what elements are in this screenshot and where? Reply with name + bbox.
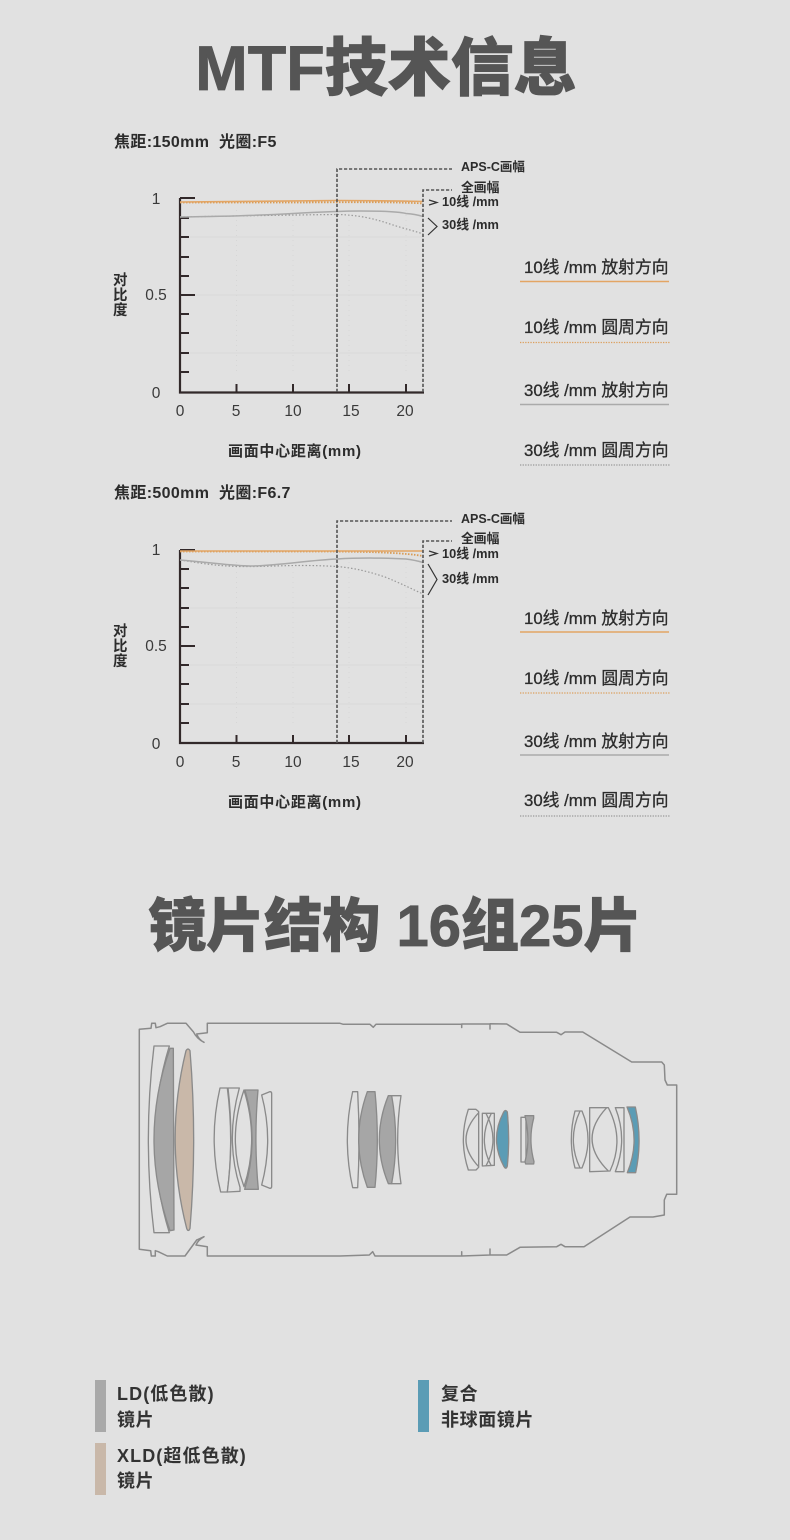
- label: 30 lines per mm: 30线 /mm: [442, 217, 499, 232]
- chart: MTF at 500mm F6.7: [113, 511, 525, 811]
- dashed frame: APS-C: [337, 521, 452, 743]
- legend: chart 2 line styles: [520, 609, 670, 816]
- y axis values: 0: [152, 385, 161, 402]
- x axis values: 20: [396, 754, 414, 771]
- label: APS-C frame: APS-C画幅: [461, 511, 525, 526]
- curve: 30 lines tangential dotted: [180, 214, 423, 234]
- legend item: 30 lines radial: 30线 /mm 放射方向: [524, 381, 669, 400]
- y axis ticks and x axis: [180, 550, 424, 743]
- heading: lens structure: 镜片结构 16组25片: [148, 894, 642, 959]
- y axis title: [113, 622, 128, 670]
- fifth group: [521, 1116, 534, 1164]
- legend item: 30 lines tangential: 30线 /mm 圆周方向: [524, 791, 669, 810]
- x axis values: [176, 403, 414, 420]
- x axis values: 5: [232, 403, 240, 420]
- fourth group: [463, 1109, 494, 1170]
- x axis values: 5: [232, 754, 240, 771]
- y axis values: 1: [152, 191, 160, 208]
- lens barrel outline: [139, 1023, 677, 1256]
- y axis values: 1: [152, 542, 160, 559]
- curve: 30 lines radial solid: [180, 558, 423, 566]
- y axis title: 度: [113, 652, 128, 670]
- x axis values: 15: [342, 754, 360, 771]
- x axis values: 0: [176, 754, 185, 771]
- aspherical element: [496, 1110, 509, 1168]
- label: composite: 复合: [441, 1383, 478, 1404]
- label: 10 lines per mm: 10线 /mm: [442, 546, 499, 561]
- y axis ticks and x axis: [180, 198, 424, 392]
- label: lens: 镜片: [117, 1470, 154, 1491]
- front element: [148, 1046, 169, 1233]
- legend item: 30 lines radial: 30线 /mm 放射方向: [524, 732, 669, 751]
- y axis values: 0.5: [145, 638, 167, 655]
- curve: 10 lines radial solid: [180, 550, 423, 552]
- left lens groups: [148, 1046, 401, 1233]
- legend: LD lens: [95, 1380, 215, 1432]
- y axis title: 对: [113, 622, 128, 640]
- second group: [214, 1088, 272, 1192]
- curve: 30 lines tangential dotted: [180, 560, 423, 594]
- label: 30 lines per mm: [428, 217, 499, 235]
- legend: chart 1 line styles: [520, 258, 670, 465]
- curve: 30 lines radial solid: [180, 211, 423, 217]
- curve: 10 lines tangential dotted: [180, 552, 423, 556]
- sixth group: [571, 1108, 624, 1172]
- y axis title: [113, 271, 128, 319]
- third group: [347, 1092, 401, 1188]
- aspherical rear element: [627, 1107, 639, 1173]
- y axis title: 度: [113, 301, 128, 319]
- y axis title: 比: [113, 638, 128, 655]
- legend item: 10 lines radial: 10线 /mm 放射方向: [524, 258, 669, 277]
- curve: 10 lines tangential dotted: [180, 202, 423, 204]
- legend item: 10 lines tangential: 10线 /mm 圆周方向: [524, 669, 669, 688]
- label: 30 lines per mm: [428, 564, 499, 595]
- heading: chart 2 focal length and aperture: 焦距:500mm: [114, 485, 209, 502]
- dashed frame: full frame: [423, 541, 452, 743]
- label: lens: 镜片: [117, 1409, 154, 1430]
- heading: chart 1 focal length and aperture: 焦距:150mm: [114, 134, 209, 151]
- x axis title: 画面中心距离(mm): [228, 442, 361, 460]
- x axis values: [176, 754, 414, 771]
- y axis title: 比: [113, 287, 128, 304]
- y axis values: 0.5: [145, 287, 167, 304]
- dashed frame: APS-C: [337, 169, 452, 392]
- legend: XLD lens: [95, 1443, 247, 1495]
- swatch: XLD tan: [95, 1443, 106, 1495]
- y axis values: 0: [152, 736, 161, 753]
- heading: chart 1 focal length and aperture: 光圈:F5: [219, 133, 277, 151]
- label: full frame: 全画幅: [461, 180, 500, 195]
- x axis values: 10: [284, 403, 302, 420]
- x axis values: 20: [396, 403, 414, 420]
- legend item: 30 lines tangential: 30线 /mm 圆周方向: [524, 441, 669, 460]
- legend: aspherical lens: [418, 1380, 534, 1432]
- chart: MTF at 150mm F5: [113, 159, 525, 460]
- right lens groups: [463, 1107, 639, 1173]
- swatch: aspherical teal: [418, 1380, 429, 1432]
- label: 10 lines per mm: 10线 /mm: [442, 194, 499, 209]
- x axis values: 15: [342, 403, 360, 420]
- x axis values: 10: [284, 754, 302, 771]
- label: full frame: 全画幅: [461, 531, 500, 546]
- label: LD: LD(低色散): [117, 1384, 215, 1404]
- legend item: 10 lines radial: 10线 /mm 放射方向: [524, 609, 669, 628]
- label: 30 lines per mm: 30线 /mm: [442, 571, 499, 586]
- y axis title: 对: [113, 271, 128, 289]
- label: XLD: XLD(超低色散): [117, 1446, 247, 1466]
- label: aspherical lens: 非球面镜片: [441, 1409, 534, 1430]
- legend item: 10 lines tangential: 10线 /mm 圆周方向: [524, 318, 669, 337]
- dashed frame: full frame: [423, 190, 452, 392]
- title: MTF技术信息: [195, 34, 577, 104]
- heading: chart 2 focal length and aperture: 光圈:F6.7: [219, 484, 291, 502]
- curve: 10 lines radial solid: [180, 200, 423, 202]
- diagram: lens cross-section: [139, 1023, 677, 1256]
- y axis values: [145, 191, 167, 402]
- y axis values: [145, 542, 167, 753]
- XLD element: [175, 1049, 194, 1230]
- x axis values: 0: [176, 403, 185, 420]
- swatch: LD gray: [95, 1380, 106, 1432]
- LD element: [154, 1048, 174, 1231]
- x axis title: 画面中心距离(mm): [228, 793, 361, 811]
- label: APS-C frame: APS-C画幅: [461, 159, 525, 174]
